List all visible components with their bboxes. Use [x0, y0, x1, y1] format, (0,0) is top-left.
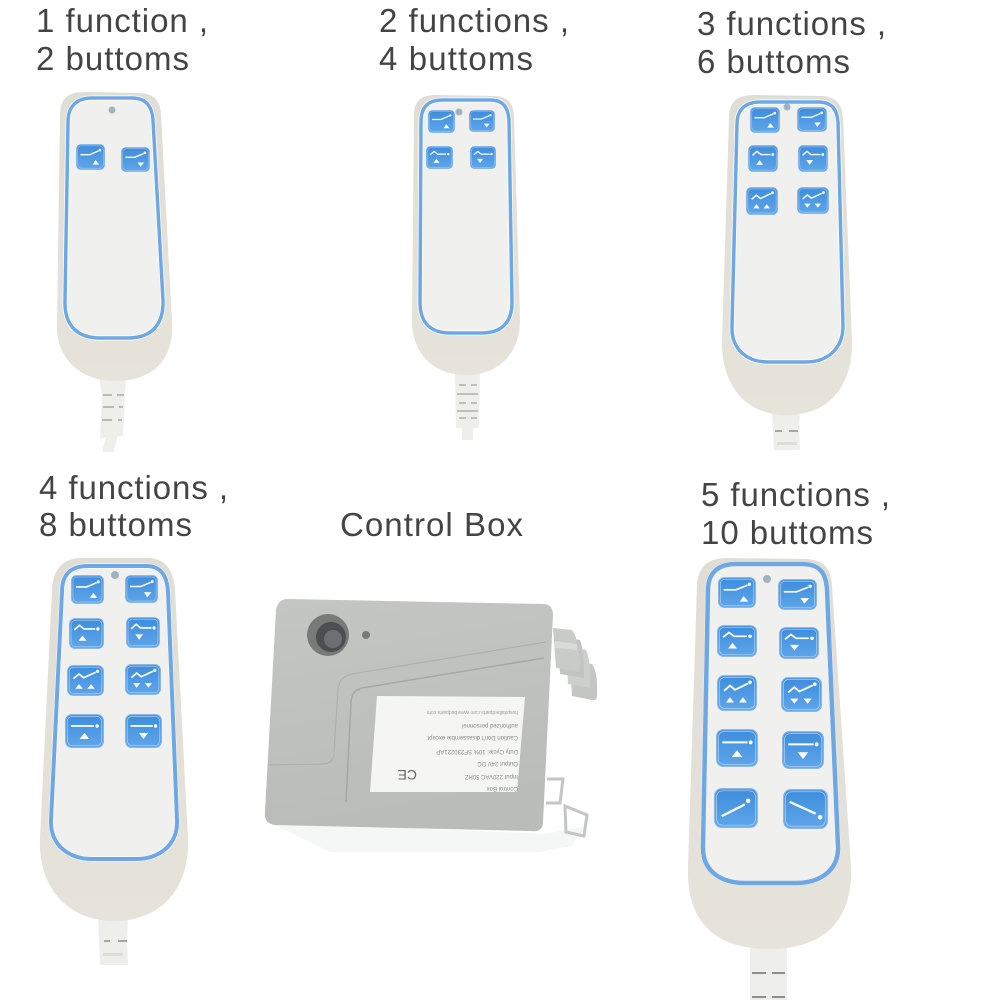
specification label, printed upside down: Duty Cycle: 10% SF230221AP [436, 748, 518, 754]
label: 4 functions, 8 buttoms: 4 functions , [39, 469, 228, 506]
indicator light [456, 108, 462, 116]
specification label, printed upside down: Caution Don't disassemble except [427, 734, 518, 740]
remote body [57, 92, 172, 381]
specification label, printed upside down: hospitalbedparts.com www.bedparts.com [427, 709, 518, 715]
indicator light [111, 571, 119, 579]
label: 1 function, 2 buttoms: 2 buttoms [36, 40, 189, 77]
blue frame [703, 564, 838, 883]
remote body [722, 95, 852, 415]
specification label, printed upside down: Input 220VAC 50HZ [464, 773, 518, 779]
housing clips [546, 779, 587, 836]
specification label, printed upside down: authorized personnel [462, 722, 518, 728]
label: 2 functions, 4 buttoms: 2 functions , [379, 2, 569, 39]
buttons [715, 578, 827, 828]
label: 2 functions, 4 buttoms: 4 buttoms [379, 40, 533, 77]
label: control box: Control Box [340, 506, 524, 543]
indicator light [763, 575, 771, 583]
panel: control box [265, 599, 597, 852]
label: 1 function, 2 buttoms [36, 2, 208, 77]
buttons [747, 108, 828, 214]
label: 3 functions, 6 buttoms: 6 buttoms [697, 43, 850, 80]
specification label, printed upside down [370, 696, 525, 792]
remote body [412, 95, 520, 375]
label: 5 functions, 10 buttoms: 10 buttoms [701, 514, 873, 551]
raised panel edge 2 [346, 658, 544, 802]
specification label, printed upside down: Output 24V DC [477, 760, 518, 766]
panel: two-function remote [412, 95, 520, 440]
icon: cord [99, 376, 126, 452]
buttons [426, 110, 496, 169]
label: 2 functions, 4 buttoms [379, 2, 569, 77]
label: 3 functions, 6 buttoms: 3 functions , [697, 5, 886, 42]
label: 5 functions, 10 buttoms: 5 functions , [701, 476, 890, 513]
specification label, printed upside down: CE [398, 767, 417, 783]
icon: cord [98, 916, 128, 965]
panel: three-function remote [722, 95, 852, 450]
panel: four-function remote [40, 558, 188, 965]
indicator light [108, 106, 116, 114]
indicator light [784, 104, 790, 110]
connector socket [307, 614, 349, 656]
cable glands [553, 628, 597, 700]
label: 4 functions, 8 buttoms: 8 buttoms [39, 506, 192, 543]
grey lid [265, 599, 553, 831]
label: 3 functions, 6 buttoms [697, 5, 886, 80]
label: 4 functions, 8 buttoms [39, 469, 228, 543]
raised panel edge [268, 642, 546, 765]
blue frame [51, 566, 177, 859]
specification label, printed upside down: Control Box [487, 785, 518, 791]
status light [362, 631, 370, 639]
remote body [688, 558, 851, 949]
panel: five-function remote [688, 558, 851, 1000]
label: 1 function, 2 buttoms: 1 function , [36, 2, 208, 39]
blue frame [732, 102, 843, 362]
icon: cord [455, 372, 480, 440]
buttons [77, 145, 149, 171]
buttons [66, 576, 161, 747]
icon: cord [772, 410, 800, 450]
panel: one-function remote [57, 92, 172, 452]
label: 5 functions, 10 buttoms [701, 476, 890, 551]
blue frame [420, 100, 512, 333]
icon: cord [750, 944, 787, 1000]
lower white housing [268, 822, 585, 852]
blue frame [65, 98, 163, 338]
remote body [40, 558, 188, 921]
